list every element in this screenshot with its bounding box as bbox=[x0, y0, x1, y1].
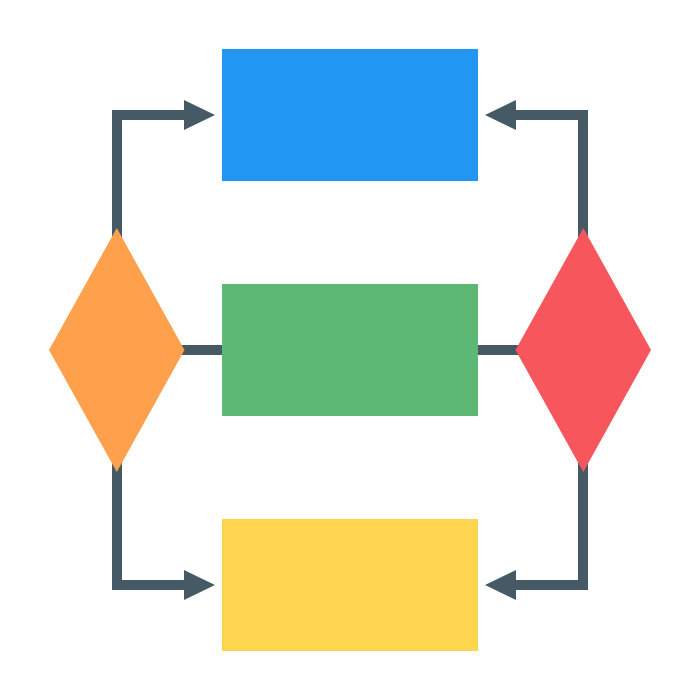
box: green bbox=[222, 284, 478, 416]
box: yellow bbox=[222, 519, 478, 651]
connector: orange diamond to green box bbox=[175, 345, 225, 355]
diamond: orange bbox=[49, 228, 184, 472]
connector: red diamond to yellow box bbox=[485, 460, 588, 600]
diamond: red bbox=[516, 228, 651, 472]
box: blue bbox=[222, 49, 478, 181]
connector: orange diamond to yellow box bbox=[112, 460, 215, 600]
connector: orange diamond to blue box bbox=[112, 100, 215, 240]
connector: green box to red diamond bbox=[475, 345, 525, 355]
connector: red diamond to blue box bbox=[485, 100, 588, 240]
